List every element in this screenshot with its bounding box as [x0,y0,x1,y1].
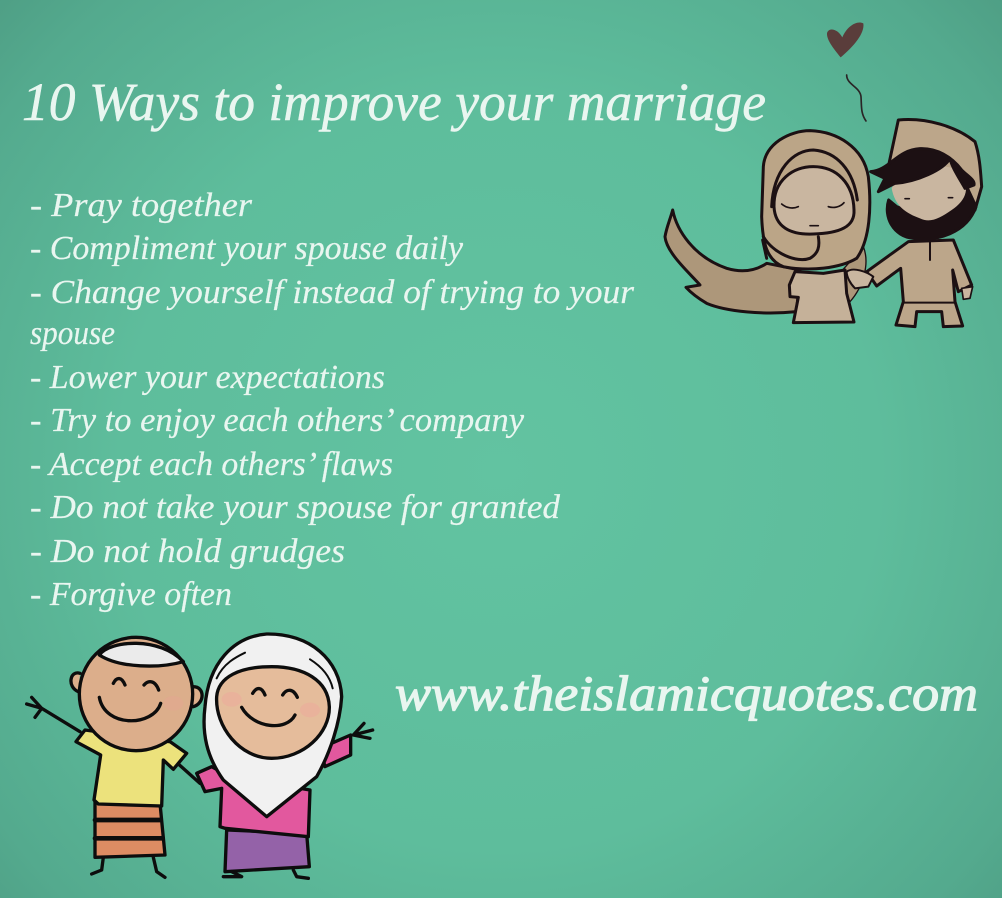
woman's closed eyes and mouth [782,203,844,226]
list of ten tips: - Change yourself instead of trying to your [30,274,635,311]
man's face [892,166,966,220]
man's beard [887,187,976,239]
scarf tail [665,210,800,313]
woman's skirt [225,830,309,872]
woman's dress [789,270,854,323]
woman's legs [223,870,308,878]
woman's face [217,667,329,758]
man's blush [163,696,183,711]
man's raised arm and hand [27,697,80,732]
title: 10 Ways to improve your marriage [22,72,766,132]
man's head [79,637,193,751]
woman's blouse [197,767,310,837]
hood back behind arm [837,247,866,302]
list of ten tips: - Do not take your spouse for granted [30,489,561,526]
list of ten tips: - Lower your expectations [30,359,385,396]
list of ten tips: - Pray together [30,187,253,224]
man's hand [962,287,973,299]
list of ten tips: spouse [30,315,115,352]
man's body [867,240,972,327]
man's hair [871,149,974,192]
man's smile and eyes [99,679,161,721]
list of ten tips: - Compliment your spouse daily [30,230,464,267]
list of ten tips: - Accept each others’ flaws [30,446,393,483]
man's ears [71,673,202,707]
scarf fold [763,237,819,260]
list of ten tips: - Do not hold grudges [30,533,345,570]
website url: www.theislamicquotes.com [395,665,978,721]
list of ten tips: - Forgive often [30,576,232,613]
woman's face [774,167,854,234]
man's cap [99,643,183,666]
man's hat [888,120,982,210]
icon: heart [827,22,863,57]
clasped hands [847,270,873,288]
woman's scarf [204,634,342,817]
man's shirt [76,730,187,806]
list of ten tips: - Try to enjoy each others’ company [30,402,525,439]
man's collar line [903,242,955,303]
man's legs [92,857,165,877]
man's skirt [95,802,165,857]
woman's blush [222,692,320,717]
woman's hood [762,131,870,269]
skirt stripes [95,820,163,838]
illustration: couple holding hands [665,22,982,327]
woman's raised sleeve [320,735,351,767]
list of ten tips [30,187,635,613]
woman's raised hand [353,723,373,738]
hood inner fold [772,150,857,207]
woman's smile and eyes [242,689,297,726]
woman's scarf folds [217,653,333,688]
linked arm [178,764,200,783]
man's eyes [905,195,953,201]
icon: squiggle line [847,75,866,121]
illustration: smiling couple [27,634,373,878]
